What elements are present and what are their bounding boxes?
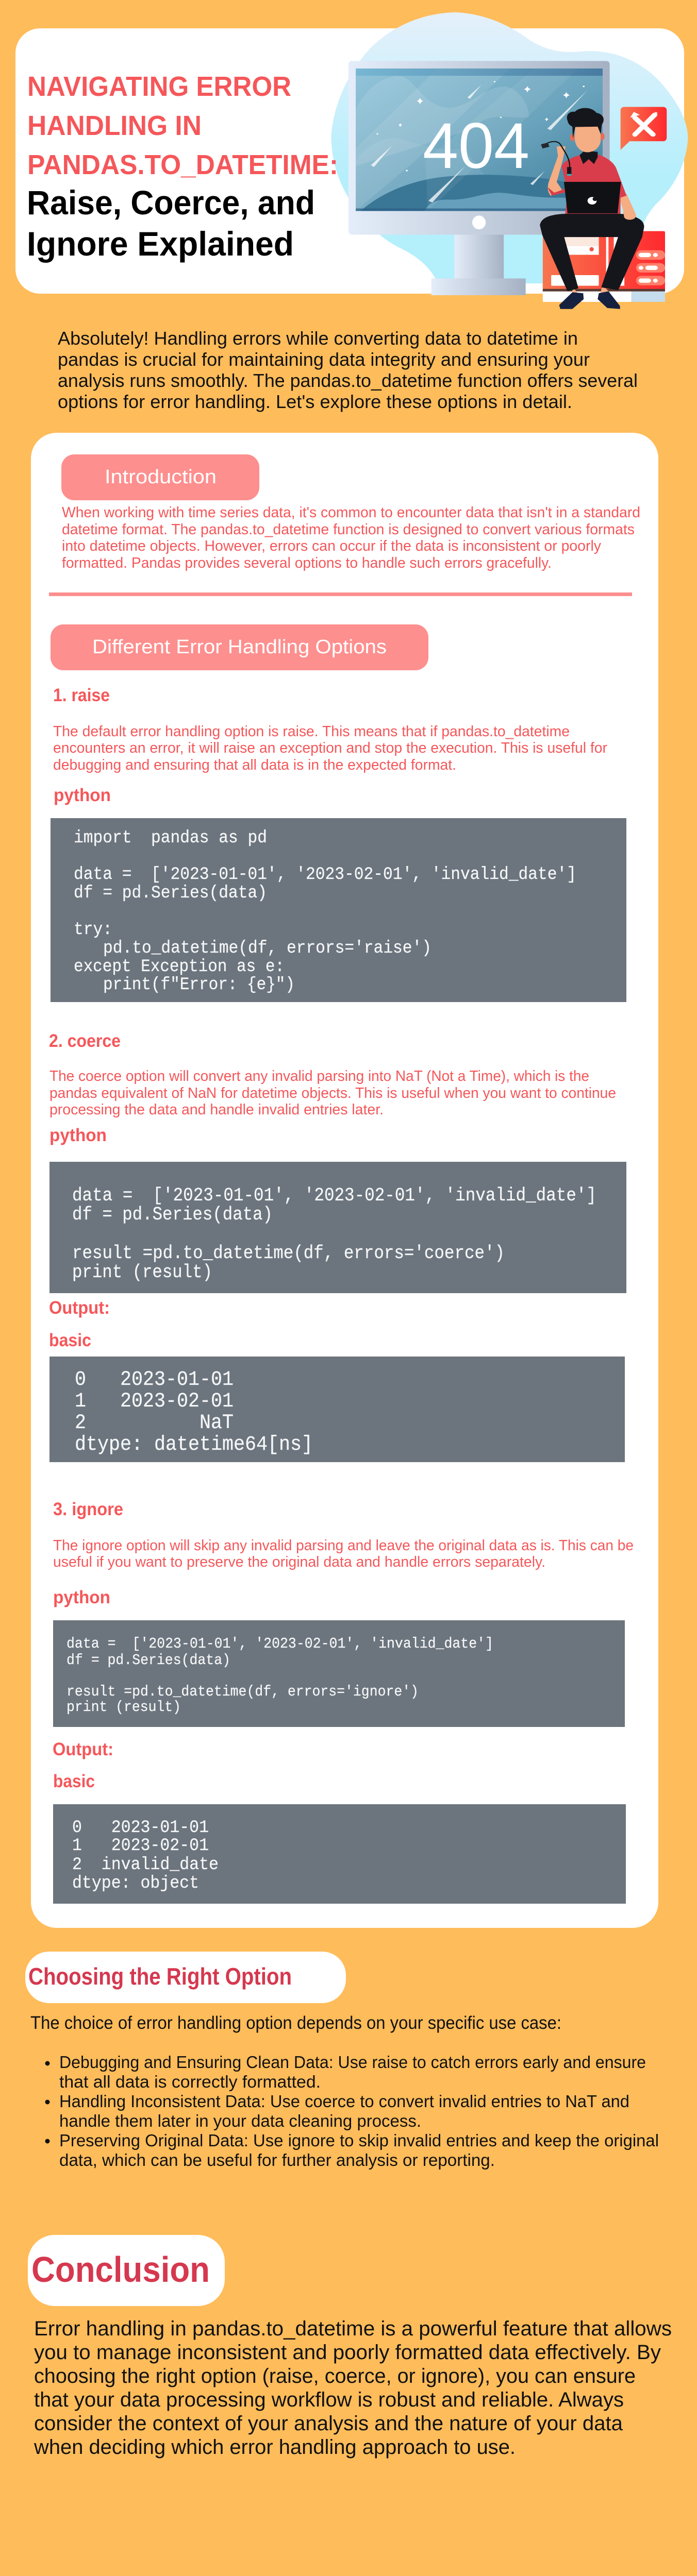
monitor power button — [472, 215, 486, 229]
monitor frame — [348, 61, 610, 235]
heading: Conclusion — [28, 2235, 225, 2306]
text: raise description: The default error handling option is raise. This means that if pandas.to_datetime — [53, 723, 570, 740]
text: conclusion body: that your data processing workflow is robust and reliable. Always — [34, 2388, 624, 2411]
text: raise description: encounters an error, it will raise an exception and stop the execution. This is useful for — [53, 740, 607, 756]
code block: ignore example — [53, 1620, 625, 1727]
title — [27, 71, 338, 263]
title line: red: PANDAS.TO_DATETIME: — [27, 149, 338, 180]
title line: red: HANDLING IN — [27, 110, 202, 141]
code block: ignore output — [53, 1804, 626, 1904]
bullet: inconsistent data: Handling Inconsistent Data: Use coerce to convert invalid entries to NaT and — [59, 2092, 629, 2111]
label: basic: basic — [49, 1330, 91, 1350]
text: raise description — [53, 723, 607, 773]
heading: Introduction — [61, 454, 259, 500]
code block: coerce output: 2 NaT — [75, 1412, 234, 1435]
title line: red — [27, 71, 338, 180]
code block: ignore output: 2 invalid_date — [72, 1855, 219, 1875]
code block: coerce example: print (result) — [72, 1262, 212, 1283]
heading: 1. raise: 1. raise — [53, 685, 110, 705]
label: Output: Output: — [53, 1739, 113, 1759]
text: conclusion body — [34, 2317, 672, 2459]
code block: raise example: pd.to_datetime(df, errors='raise') — [103, 939, 432, 958]
code block: raise example — [51, 818, 626, 1002]
text: introduction body — [62, 504, 640, 571]
illustration background blob — [331, 12, 688, 283]
label: Output: Output: — [49, 1298, 110, 1318]
text: introduction body: datetime format. The pandas.to_datetime function is designed to convert various formats — [62, 521, 635, 538]
text: conclusion body: you to manage inconsistent and poorly formatted data effectively. By — [34, 2341, 661, 2364]
bullet: debugging: that all data is correctly formatted. — [59, 2072, 321, 2091]
label: python: python — [53, 1587, 110, 1607]
bullet: preserving data: Preserving Original Data: Use ignore to skip invalid entries and keep the original — [59, 2131, 659, 2150]
code block: ignore example: data = ['2023-01-01', '2023-02-01', 'invalid_date'] — [67, 1635, 493, 1652]
code block: coerce output: dtype: datetime64[ns] — [75, 1433, 313, 1456]
bullet list: use cases — [45, 2053, 659, 2170]
heading: Choosing the Right Option: Choosing the Right Option — [28, 1963, 292, 1990]
text: choice intro: The choice of error handling option depends on your specific use case: — [30, 2013, 561, 2033]
text: conclusion body: Error handling in pandas.to_datetime is a powerful feature that allows — [34, 2317, 672, 2340]
label: python: python — [49, 1125, 107, 1145]
code block: coerce example: data = ['2023-01-01', '2023-02-01', 'invalid_date'] — [72, 1185, 596, 1206]
code block: ignore example: print (result) — [67, 1699, 181, 1716]
intro paragraph — [58, 328, 638, 412]
text: raise description: debugging and ensuring that all data is in the expected format. — [53, 757, 456, 773]
heading: 3. ignore: 3. ignore — [53, 1499, 123, 1519]
bullet: preserving data: data, which can be useful for further analysis or reporting. — [59, 2150, 495, 2170]
code block: ignore output: dtype: object — [72, 1874, 199, 1893]
server tower — [543, 231, 665, 302]
code block: raise example: data = ['2023-01-01', '2023-02-01', 'invalid_date'] — [74, 865, 576, 885]
icon: repair tools speech bubble — [621, 107, 667, 150]
code block: coerce example: df = pd.Series(data) — [72, 1204, 273, 1225]
text: ignore description: useful if you want to preserve the original data and handle errors separately. — [53, 1554, 545, 1570]
text: conclusion body: when deciding which error handling approach to use. — [34, 2436, 516, 2459]
text: coerce description: pandas equivalent of NaN for datetime objects. This is useful when you want to continue — [49, 1085, 616, 1101]
bullet: inconsistent data — [45, 2092, 629, 2130]
code block: raise example: try: — [74, 920, 112, 940]
code block: raise example: except Exception as e: — [74, 957, 285, 977]
bullet: inconsistent data: handle them later in your data cleaning process. — [59, 2111, 421, 2130]
text: introduction body: formatted. Pandas provides several options to handle such errors gracefully. — [62, 555, 552, 571]
code block: ignore example: result =pd.to_datetime(df, errors='ignore') — [67, 1683, 419, 1700]
code block: coerce example — [49, 1162, 626, 1293]
code block: raise example: import pandas as pd — [74, 828, 267, 848]
text: introduction body: When working with time series data, it's common to encounter data that isn't in a standard — [62, 504, 640, 521]
title line: black — [27, 183, 315, 263]
intro paragraph: Absolutely! Handling errors while converting data to datetime in — [58, 328, 578, 349]
code block: coerce example: result =pd.to_datetime(df, errors='coerce') — [72, 1243, 505, 1264]
text: coerce description: processing the data and handle invalid entries later. — [49, 1101, 384, 1118]
bullet: debugging: Debugging and Ensuring Clean Data: Use raise to catch errors early and ensure — [59, 2053, 646, 2072]
heading: Choosing the Right Option — [25, 1952, 346, 2003]
title line: black: Raise, Coerce, and — [27, 183, 315, 222]
text: coerce description — [49, 1068, 616, 1118]
text: coerce description: The coerce option will convert any invalid parsing into NaT (Not a Time), which is the — [49, 1068, 589, 1084]
title line: black: Ignore Explained — [27, 225, 294, 263]
bullet: preserving data — [45, 2131, 659, 2170]
text: ignore description — [53, 1537, 634, 1570]
code block: ignore example: df = pd.Series(data) — [67, 1652, 230, 1669]
developer figure — [540, 108, 644, 309]
heading: Different Error Handling Options — [51, 624, 428, 670]
code block: raise example: print(f"Error: {e}") — [103, 975, 295, 995]
intro paragraph: pandas is crucial for maintaining data integrity and ensuring your — [58, 349, 590, 370]
monitor stand — [432, 235, 526, 295]
monitor screen — [356, 69, 603, 211]
label: basic: basic — [53, 1771, 95, 1791]
code block: ignore output: 1 2023-02-01 — [72, 1836, 209, 1856]
heading: Introduction: Introduction — [105, 466, 217, 488]
illustration: 404 monitor with developer — [331, 12, 688, 309]
code block: coerce output: 1 2023-02-01 — [75, 1390, 234, 1413]
panel: main content card — [31, 433, 658, 1928]
text: ignore description: The ignore option will skip any invalid parsing and leave the original data as is. This can be — [53, 1537, 634, 1554]
code block: ignore output: 0 2023-01-01 — [72, 1818, 209, 1838]
label: python: python — [54, 785, 111, 805]
heading: Different Error Handling Options: Different Error Handling Options — [92, 636, 387, 658]
panel: header card — [15, 28, 684, 294]
code block: coerce output — [49, 1357, 625, 1462]
heading: 2. coerce: 2. coerce — [49, 1031, 121, 1051]
bullet: debugging — [45, 2053, 646, 2091]
code block: raise example: df = pd.Series(data) — [74, 884, 267, 903]
intro paragraph: analysis runs smoothly. The pandas.to_datetime function offers several — [58, 370, 638, 391]
404 label: 404 — [423, 110, 529, 182]
title line: red: NAVIGATING ERROR — [27, 71, 291, 102]
intro paragraph: options for error handling. Let's explore these options in detail. — [58, 391, 572, 412]
text: conclusion body: consider the context of your analysis and the nature of your data — [34, 2412, 623, 2435]
code block: coerce output: 0 2023-01-01 — [75, 1368, 234, 1392]
heading: Conclusion: Conclusion — [31, 2249, 210, 2290]
text: introduction body: into datetime objects. However, errors can occur if the data is inconsistent or poorly — [62, 538, 601, 554]
text: conclusion body: choosing the right option (raise, coerce, or ignore), you can ensure — [34, 2365, 636, 2387]
